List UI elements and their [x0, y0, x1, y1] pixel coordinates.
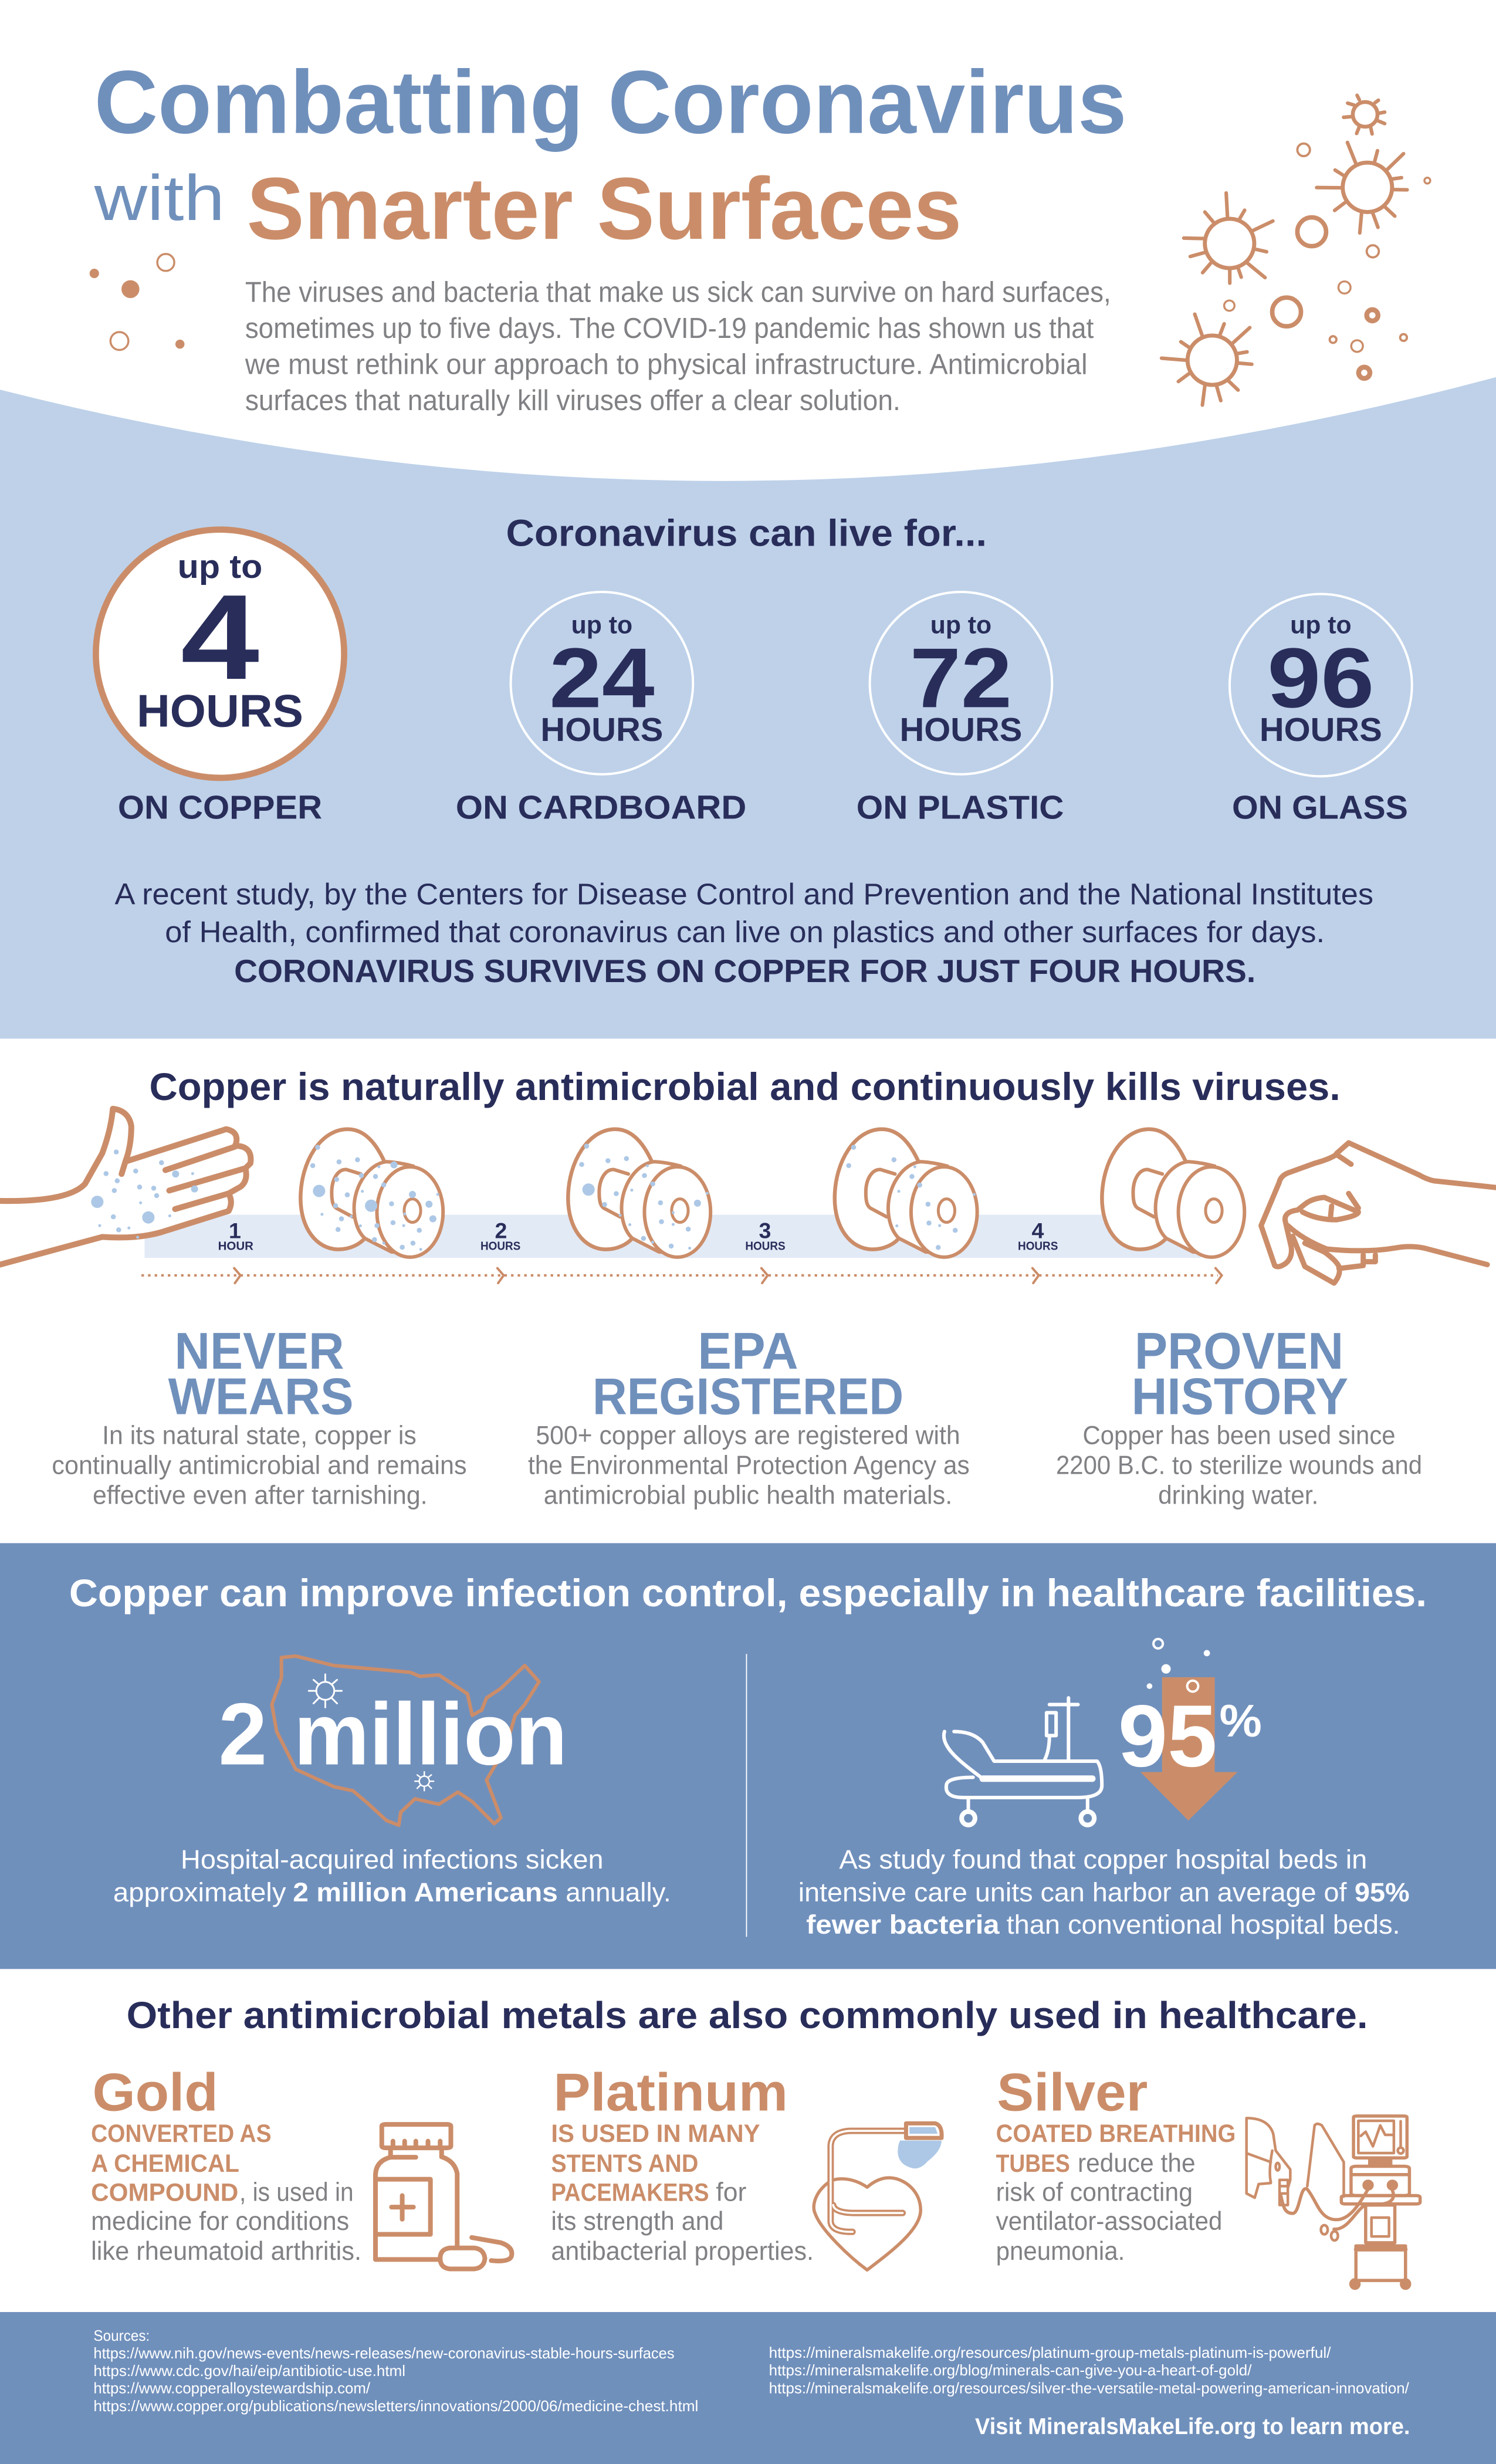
title: Smarter Surfaces [247, 159, 962, 258]
study text block: CORONAVIRUS SURVIVES ON COPPER FOR JUST FOUR HOURS. [234, 953, 1255, 989]
text block: hospital infections: annually. [566, 1877, 671, 1907]
sources left: Sources: [93, 2328, 150, 2344]
column: silver: COATED BREATHING [996, 2120, 1236, 2147]
icon: viruses and bubbles [1162, 95, 1430, 405]
timeline labels: 1 [229, 1219, 241, 1243]
column: gold: medicine for conditions [91, 2207, 349, 2236]
title [94, 53, 1127, 258]
sources right [769, 2345, 1410, 2397]
intro text block: sometimes up to five days. The COVID-19 pandemic has shown us that [245, 313, 1094, 344]
column: silver: ventilator-associated [996, 2207, 1222, 2236]
heading: infection control: Copper can improve infection control, especially in healthcare facilities. [69, 1572, 1427, 1615]
heading: other metals: Other antimicrobial metals are also commonly used in healthcare. [127, 1994, 1368, 2036]
panel: coronavirus lifetime [0, 377, 1496, 1039]
sources left: https://www.copperalloystewardship.com/ [93, 2380, 371, 2397]
column: silver [996, 2063, 1236, 2266]
column: gold: Gold [92, 2063, 218, 2122]
column: epa registered [528, 1322, 970, 1509]
column: platinum: its strength and [551, 2207, 723, 2236]
icon: pill bottle [375, 2124, 512, 2269]
stat: glass 96 hours: ON GLASS [1232, 789, 1408, 826]
column: never wears: continually antimicrobial and remains [52, 1451, 467, 1480]
column: platinum: for [716, 2178, 746, 2206]
icon: left hand with germs [0, 1109, 251, 1265]
intro text block: The viruses and bacteria that make us sick can survive on hard surfaces, [245, 276, 1111, 308]
column: epa registered: REGISTERED [593, 1368, 903, 1426]
stat: 95 percent: 95 [1118, 1687, 1217, 1785]
icon: down arrow [1140, 1677, 1237, 1820]
sources left [93, 2328, 698, 2415]
icon: virus on map small [415, 1772, 434, 1791]
title: with [94, 163, 225, 234]
timeline labels [218, 1219, 1058, 1253]
column: proven history: HISTORY [1132, 1368, 1348, 1426]
stat: plastic 72 hours: up to [930, 611, 991, 639]
title: Combatting Coronavirus [94, 53, 1127, 153]
column: proven history: 2200 B.C. to sterilize wounds and [1056, 1451, 1422, 1480]
stat: plastic 72 hours [857, 592, 1064, 826]
column: gold [91, 2063, 361, 2266]
icon: ventilator [1247, 2116, 1420, 2289]
timeline labels: 3 [759, 1219, 771, 1243]
text block: hospital infections: Hospital-acquired infections sicken [181, 1844, 604, 1874]
icon: germs on knobs [313, 1146, 974, 1250]
stat: 95 percent [1118, 1687, 1262, 1785]
stat: cardboard 24 hours: 24 [549, 630, 655, 725]
column: platinum: Platinum [553, 2063, 788, 2122]
sources right: https://mineralsmakelife.org/blog/minerals-can-give-you-a-heart-of-gold/ [769, 2363, 1252, 2379]
intro text block [245, 276, 1111, 417]
column: epa registered: 500+ copper alloys are registered with [536, 1421, 960, 1450]
text block: copper beds: fewer bacteria [806, 1910, 1000, 1940]
stat: 2 million: million [294, 1685, 567, 1783]
stat: cardboard 24 hours [456, 592, 746, 826]
timeline arrow [141, 1268, 1222, 1283]
stat: glass 96 hours: up to [1290, 611, 1352, 639]
study text block: of Health, confirmed that coronavirus can live on plastics and other surfaces for days. [165, 915, 1325, 949]
column: never wears: In its natural state, copper is [102, 1421, 417, 1450]
panel: footer [0, 2312, 1496, 2464]
stat: plastic 72 hours: ON PLASTIC [857, 789, 1064, 826]
sources left: https://www.cdc.gov/hai/eip/antibiotic-use.html [93, 2363, 405, 2380]
column: never wears [52, 1322, 467, 1509]
column: gold: COMPOUND [91, 2178, 238, 2206]
timeline labels: HOURS [1018, 1240, 1058, 1253]
stat: 2 million: 2 [218, 1685, 267, 1783]
timeline labels: 4 [1031, 1219, 1044, 1243]
text block: hospital infections: approximately [113, 1877, 286, 1907]
text block: copper beds [798, 1844, 1410, 1940]
column: proven history: Copper has been used since [1083, 1421, 1396, 1450]
column: proven history [1056, 1322, 1422, 1509]
timeline labels: HOURS [480, 1240, 520, 1253]
column: silver: Silver [997, 2063, 1148, 2122]
timeline band [144, 1215, 1200, 1258]
column: never wears: WEARS [168, 1368, 354, 1426]
text block: copper beds: 95% [1355, 1877, 1410, 1907]
stat: plastic 72 hours: 72 [910, 630, 1012, 725]
column: proven history: PROVEN [1135, 1322, 1343, 1380]
sources left: https://www.nih.gov/news-events/news-releases/new-coronavirus-stable-hours-surfaces [93, 2345, 675, 2362]
column: never wears: effective even after tarnishing. [93, 1481, 428, 1509]
sources right: https://mineralsmakelife.org/resources/silver-the-versatile-metal-powering-american-innovation/ [769, 2380, 1410, 2397]
column: proven history: drinking water. [1158, 1481, 1318, 1509]
intro text block: we must rethink our approach to physical infrastructure. Antimicrobial [245, 349, 1088, 381]
stat: cardboard 24 hours: ON CARDBOARD [456, 789, 746, 826]
icon: door knobs [300, 1129, 1244, 1257]
column: epa registered: EPA [698, 1322, 798, 1380]
call to action: Visit MineralsMakeLife.org to learn more. [975, 2414, 1410, 2439]
column: platinum: PACEMAKERS [551, 2178, 709, 2206]
intro text block: surfaces that naturally kill viruses offer a clear solution. [245, 385, 901, 417]
column: gold: A CHEMICAL [91, 2150, 239, 2177]
stat: cardboard 24 hours: HOURS [540, 711, 663, 748]
stat: copper 4 hours: up to [178, 548, 262, 585]
study text block [115, 878, 1373, 989]
icon: bubbles [1147, 1639, 1210, 1691]
icon: us map [272, 1656, 539, 1825]
timeline labels: HOUR [218, 1240, 253, 1253]
column: platinum: STENTS AND [551, 2150, 698, 2177]
column: silver: risk of contracting [996, 2178, 1193, 2206]
column: silver: TUBES [996, 2150, 1070, 2177]
stat: copper 4 hours: ON COPPER [118, 789, 322, 826]
heading: coronavirus can live for: Coronavirus can live for... [506, 512, 987, 554]
text block: hospital infections [113, 1844, 671, 1907]
stat: cardboard 24 hours: up to [571, 611, 632, 639]
study text block: A recent study, by the Centers for Disease Control and Prevention and the National Institutes [115, 878, 1373, 911]
text block: copper beds: intensive care units can harbor an average of [798, 1877, 1347, 1907]
icon: heart and pacemaker [814, 2123, 942, 2270]
column: silver: reduce the [1078, 2149, 1196, 2178]
column: epa registered: the Environmental Protection Agency as [528, 1451, 970, 1480]
icon: left bubbles [90, 254, 184, 350]
stat: copper 4 hours: 4 [181, 569, 259, 705]
stat: glass 96 hours: HOURS [1260, 711, 1382, 748]
timeline labels: 2 [495, 1219, 507, 1243]
panel: infection control [0, 1543, 1496, 1969]
icon: hospital bed [944, 1698, 1102, 1825]
stat: 95 percent: % [1220, 1696, 1262, 1747]
column: silver: pneumonia. [996, 2237, 1125, 2266]
stat: copper 4 hours: HOURS [137, 686, 303, 737]
text block: copper beds: than conventional hospital beds. [1007, 1910, 1400, 1940]
heading: copper is antimicrobial: Copper is naturally antimicrobial and continuously kills viruses. [149, 1065, 1341, 1108]
sources left: https://www.copper.org/publications/newsletters/innovations/2000/06/medicine-chest.html [93, 2398, 698, 2415]
icon: right hand [1261, 1143, 1496, 1283]
column: gold: CONVERTED AS [91, 2120, 272, 2147]
column: platinum [551, 2063, 814, 2266]
column: gold: like rheumatoid arthritis. [91, 2237, 361, 2266]
stat: plastic 72 hours: HOURS [899, 711, 1022, 748]
column: gold: , is used in [239, 2178, 354, 2206]
sources right: https://mineralsmakelife.org/resources/platinum-group-metals-platinum-is-powerful/ [769, 2345, 1331, 2361]
column: epa registered: antimicrobial public health materials. [544, 1481, 952, 1509]
stat: copper 4 hours [96, 530, 344, 826]
column: platinum: IS USED IN MANY [551, 2120, 760, 2147]
text block: hospital infections: 2 million Americans [293, 1877, 558, 1907]
text block: copper beds: As study found that copper hospital beds in [839, 1844, 1367, 1874]
stat: glass 96 hours: 96 [1267, 630, 1374, 725]
icon: virus on map large [309, 1674, 342, 1707]
stat: glass 96 hours [1230, 594, 1412, 826]
column: never wears: NEVER [174, 1322, 344, 1380]
column: platinum: antibacterial properties. [551, 2237, 814, 2266]
timeline labels: HOURS [745, 1240, 786, 1253]
